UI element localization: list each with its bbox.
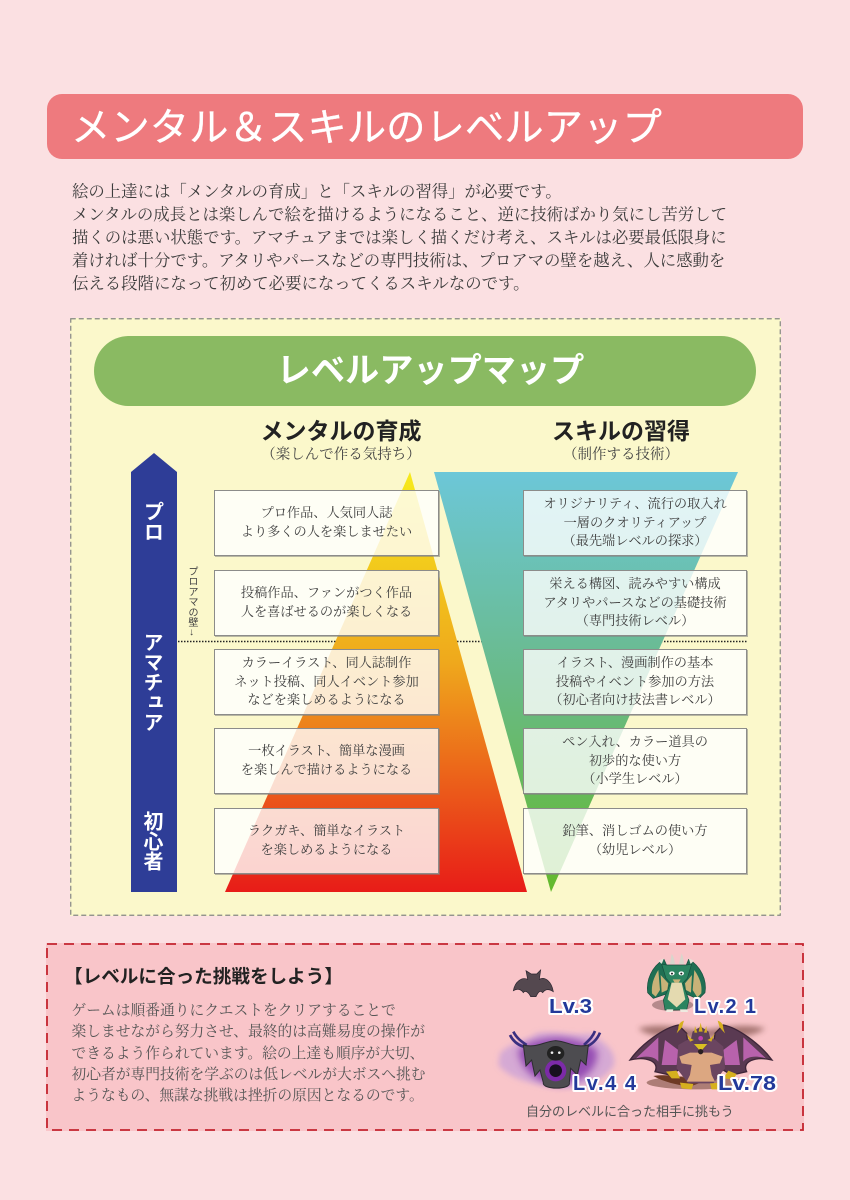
mental box 1: [214, 808, 439, 874]
skill box 3: 投稿やイベント参加の方法: [556, 674, 714, 688]
skill box 4: 栄える構図、読みやすい構成: [549, 576, 721, 591]
heading: mental: メンタルの育成: [260, 418, 422, 444]
icon: green dragon: [647, 953, 705, 1012]
challenge body text: できるよう作られています。絵の上達も順序が大切、: [72, 1046, 424, 1062]
mental box 2: を楽しんで描けるようになる: [241, 762, 412, 777]
panel: challenge: [46, 943, 804, 1131]
challenge body text: ようなもの、無謀な挑戦は挫折の原因となるのです。: [72, 1088, 424, 1104]
intro paragraph: 絵の上達には「メンタルの育成」と「スキルの習得」が必要です。: [72, 182, 562, 200]
challenge body text: 楽しませながら努力させ、最終的は高難易度の操作が: [72, 1024, 425, 1040]
mental pyramid: [225, 472, 527, 892]
mental box 1: ラクガキ、簡単なイラスト: [248, 823, 405, 838]
skill inverted triangle: [434, 472, 738, 892]
panel: level-up map: [70, 318, 781, 916]
mental box 1: を楽しめるようになる: [261, 842, 392, 857]
level label 78: Lv.78: [718, 1073, 776, 1095]
mental box 3: [214, 649, 439, 714]
label: amateur: アマチュア: [140, 632, 162, 732]
challenge heading: 【レベルに合った挑戦をしよう】: [64, 966, 343, 987]
skill box 2: （小学生レベル）: [582, 771, 688, 786]
mental box 3: などを楽しめるようになる: [247, 692, 406, 707]
skill box 2: ペン入れ、カラー道具の: [562, 734, 708, 749]
skill box 3: （初心者向け技法書レベル）: [549, 692, 721, 707]
skill box 4: [523, 570, 747, 636]
mental box 4: 人を喜ばせるのが楽しくなる: [241, 604, 412, 619]
heading: mental: [260, 418, 422, 463]
skill box 5: [523, 490, 747, 556]
intro paragraph: 描くのは悪い状態です。アマチュアまでは楽しく描くだけ考え、スキルは必要最低限身に: [72, 228, 727, 247]
skill box 1: [523, 808, 747, 874]
mental box 5: プロ作品、人気同人誌: [261, 505, 392, 520]
mental box 5: [214, 490, 439, 556]
mental box 3: カラーイラスト、同人誌制作: [242, 655, 411, 670]
intro paragraph: メンタルの成長とは楽しんで絵を描けるようになること、逆に技術ばかり気にし苦労して: [72, 205, 727, 224]
label: pro: プロ: [140, 501, 163, 542]
intro paragraph: 着ければ十分です。アタリやパースなどの専門技術は、プロアマの壁を越え、人に感動を: [72, 251, 725, 270]
mental box 2: [214, 728, 439, 794]
monsters caption: 自分のレベルに合った相手に挑もう: [526, 1104, 734, 1119]
map title pill: レベルアップマップ: [277, 352, 584, 390]
wall note: プロアマの壁↓: [186, 566, 197, 638]
icon: ghost monster: [498, 1031, 614, 1088]
skill box 5: （最先端レベルの探求）: [562, 533, 708, 548]
title banner: メンタル＆スキルのレベルアップ: [71, 106, 662, 150]
skill box 2: 初歩的な使い方: [589, 752, 681, 768]
heading: mental: （楽しんで作る気持ち）: [261, 447, 421, 463]
mental box 4: [214, 570, 439, 636]
level label 21: Lv.2 1: [694, 996, 756, 1018]
mental box 2: 一枚イラスト、簡単な漫画: [248, 743, 405, 758]
mental box 5: より多くの人を楽しませたい: [241, 524, 412, 539]
mental box 3: ネット投稿、同人イベント参加: [234, 674, 419, 688]
level arrow: [131, 453, 177, 892]
skill box 5: オリジナリティ、流行の取入れ: [543, 496, 727, 511]
title banner: [47, 94, 803, 159]
label: beginner: 初心者: [140, 811, 162, 871]
skill box 3: [523, 649, 747, 714]
challenge body text: ゲームは順番通りにクエストをクリアすることで: [72, 1003, 396, 1019]
skill box 4: （専門技術レベル）: [576, 613, 694, 628]
skill box 1: （幼児レベル）: [589, 842, 681, 857]
heading: skill: スキルの習得: [552, 418, 690, 444]
heading: skill: [552, 418, 690, 463]
icon: winged demon: [630, 1021, 772, 1089]
icon: bat: [513, 970, 553, 997]
intro paragraph: 伝える段階になって初めて必要になってくるスキルなのです。: [72, 274, 529, 293]
skill box 5: 一層のクオリティアップ: [564, 514, 706, 530]
skill box 1: 鉛筆、消しゴムの使い方: [562, 823, 708, 838]
skill box 4: アタリやパースなどの基礎技術: [543, 594, 727, 610]
skill box 2: [523, 728, 747, 794]
intro paragraph: [72, 182, 727, 293]
level label 3: Lv.3: [549, 996, 592, 1018]
map title pill: [94, 336, 756, 406]
challenge body text: 初心者が専門技術を学ぶのは低レベルが大ボスへ挑む: [72, 1067, 426, 1083]
heading: skill: （制作する技術）: [563, 447, 679, 463]
mental box 4: 投稿作品、ファンがつく作品: [241, 585, 412, 600]
wall divider line: [178, 640, 748, 642]
skill box 3: イラスト、漫画制作の基本: [557, 655, 713, 670]
challenge body text: [72, 1002, 426, 1104]
level label 44: Lv.4 4: [573, 1073, 637, 1095]
